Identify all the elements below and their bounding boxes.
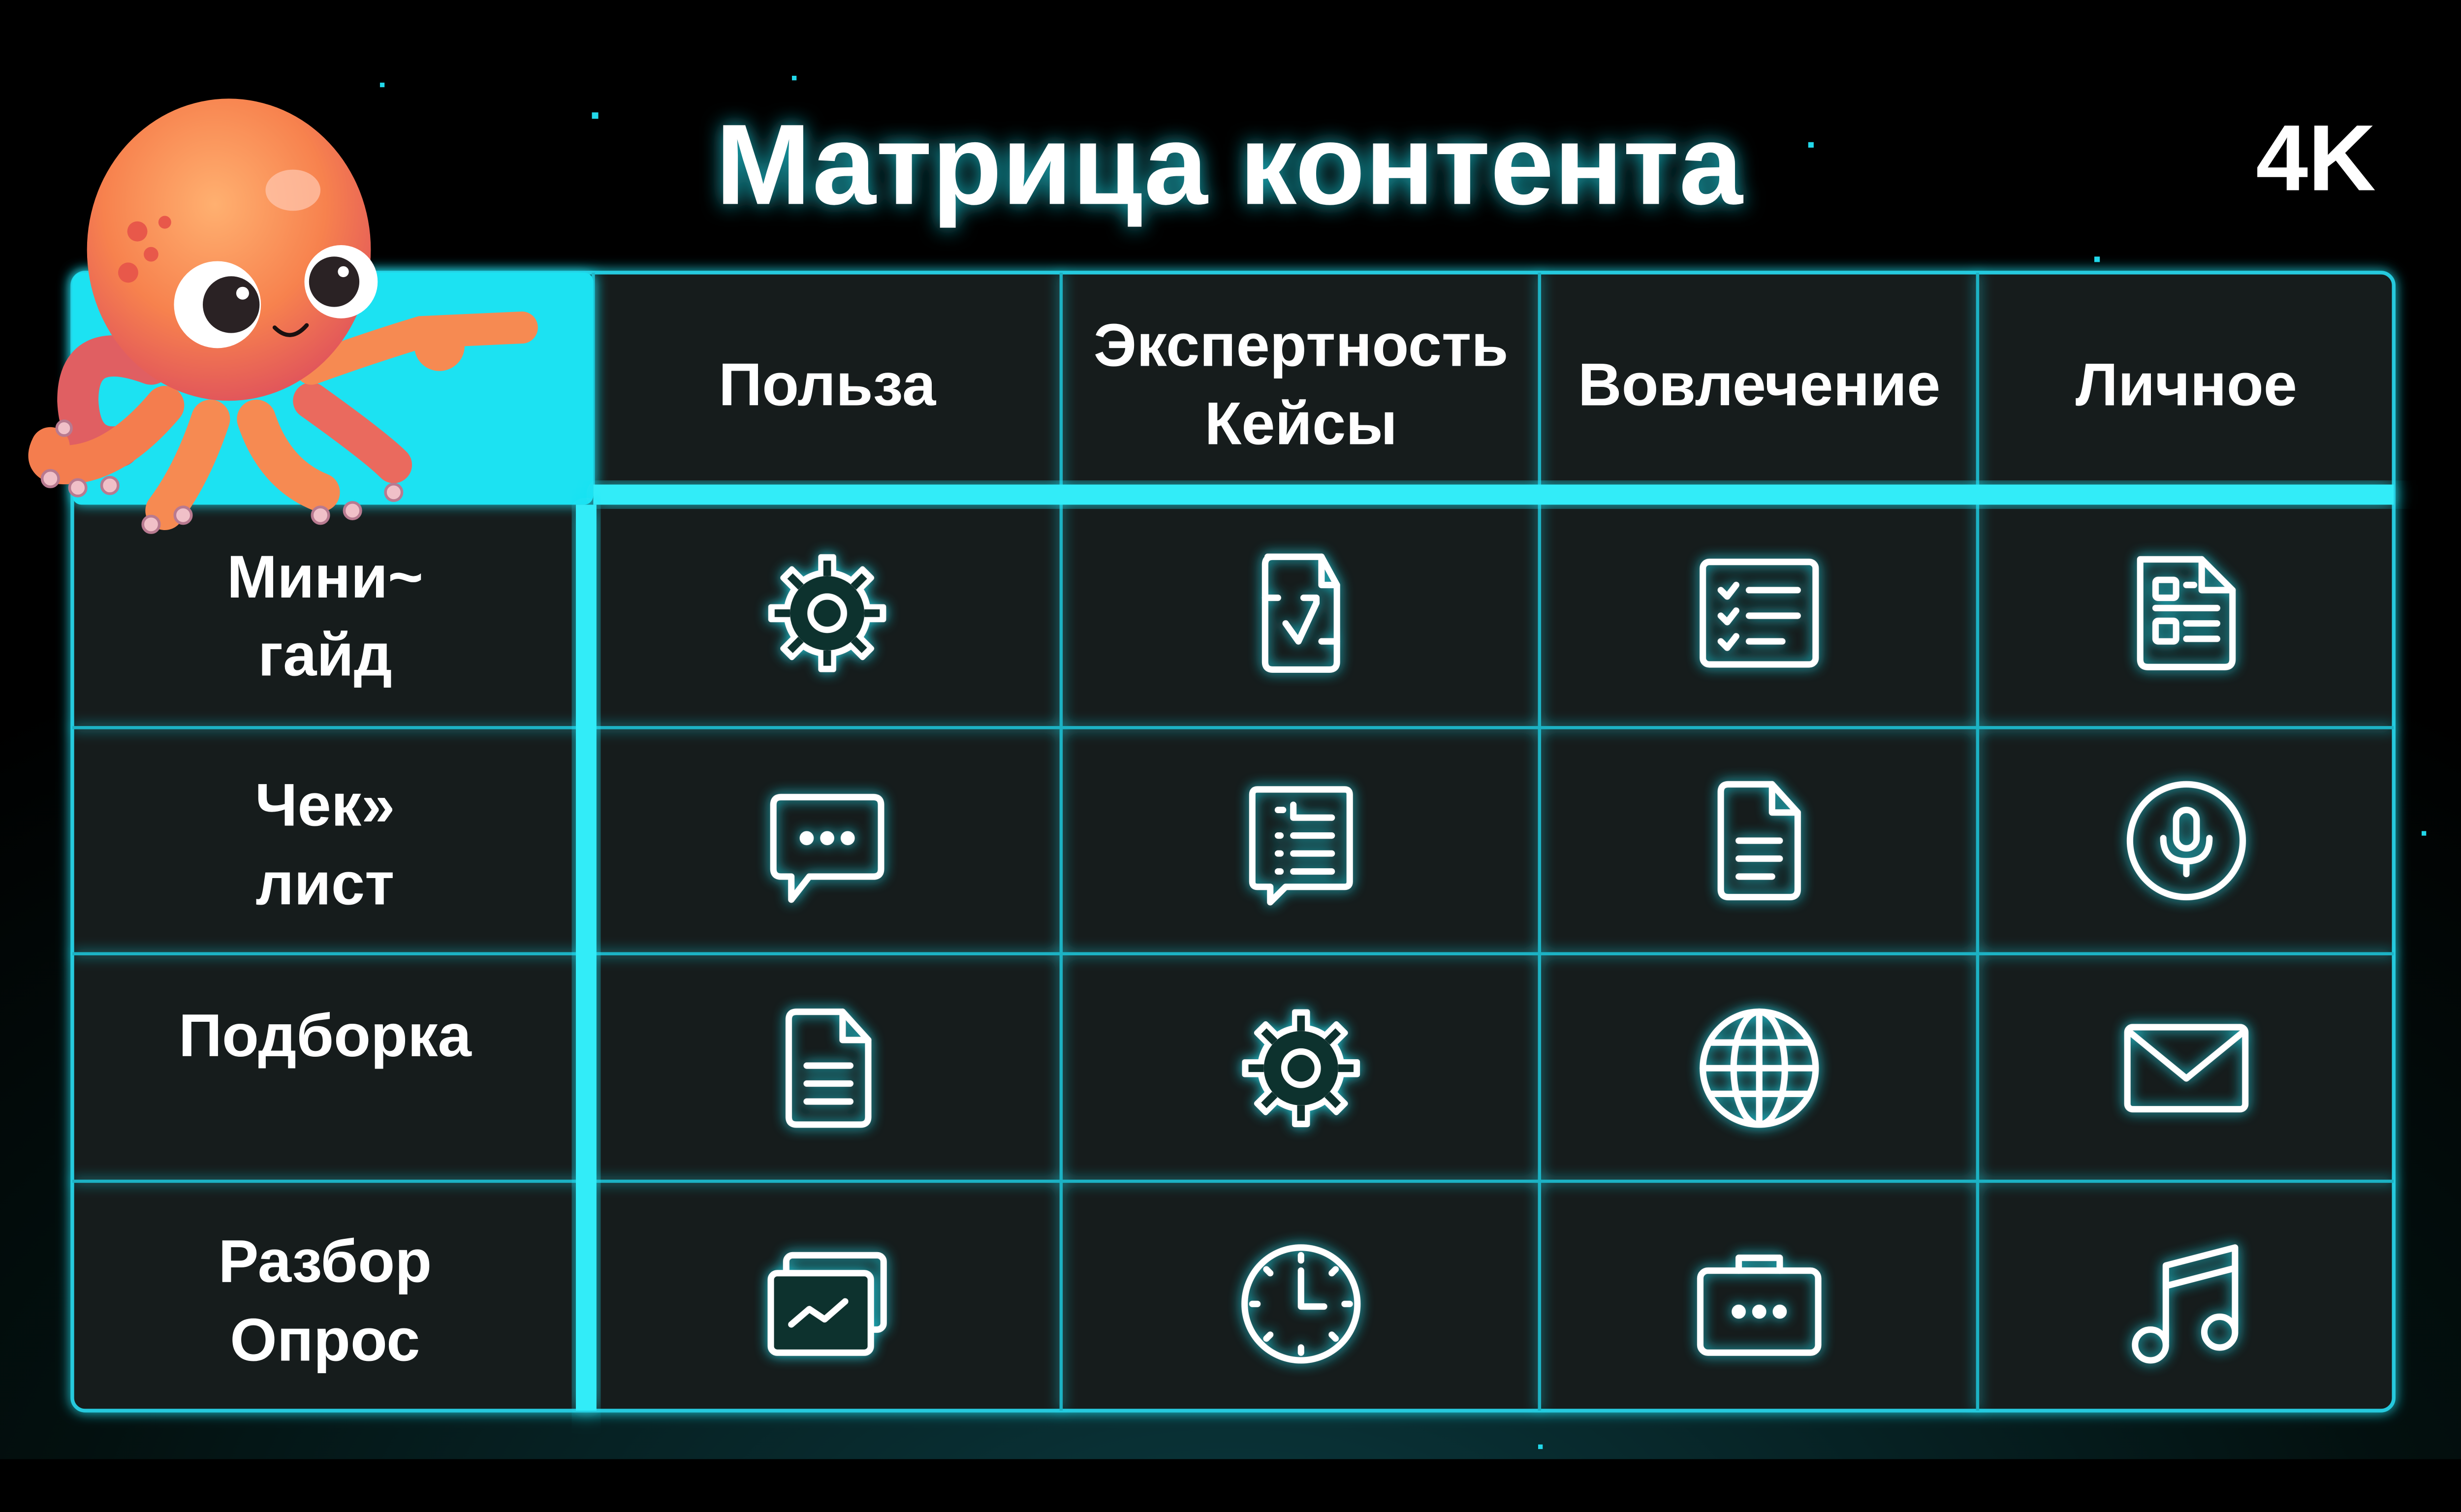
octopus mascot xyxy=(42,98,522,533)
header bar xyxy=(593,484,2394,504)
vertical bar xyxy=(576,504,597,1411)
column headers: Экспертность xyxy=(1094,312,1509,379)
row labels: гайд xyxy=(258,621,392,689)
icon: document xyxy=(789,1012,868,1125)
tentacles xyxy=(48,327,522,510)
row labels: Мини~ xyxy=(227,543,423,611)
icon: document check xyxy=(1265,557,1337,669)
icon: music note xyxy=(2135,1248,2235,1360)
icon: briefcase xyxy=(1700,1258,1818,1353)
row labels: Разбор xyxy=(218,1228,432,1295)
corner cyan cell xyxy=(72,273,593,504)
icon: clock xyxy=(1245,1248,1357,1360)
hand xyxy=(414,321,465,371)
icon: globe xyxy=(1703,1012,1816,1125)
icon: images chart xyxy=(771,1255,883,1353)
icon: gear xyxy=(768,554,886,672)
column headers: Личное xyxy=(2076,351,2297,419)
eyes xyxy=(174,261,261,348)
icon: form document xyxy=(2140,559,2233,667)
icon: chat bubble xyxy=(773,797,881,900)
badge: 4K: 4K xyxy=(2256,105,2376,210)
column headers: Польза xyxy=(719,351,937,419)
icon: checklist xyxy=(1703,562,1816,664)
icon: envelope xyxy=(2127,1027,2245,1109)
icon: microphone xyxy=(2130,784,2243,897)
column headers xyxy=(719,312,2297,458)
column headers: Кейсы xyxy=(1204,390,1397,458)
head xyxy=(87,98,371,401)
row labels xyxy=(179,543,473,1374)
icon: list bubble xyxy=(1252,789,1350,902)
icon: document lines xyxy=(1721,784,1798,897)
icon: gear 2 xyxy=(1242,1009,1360,1127)
row labels: Чек» xyxy=(255,771,395,839)
icons xyxy=(768,554,2245,1360)
suckers xyxy=(42,421,402,533)
row labels: лист xyxy=(255,850,394,917)
column headers: Вовлечение xyxy=(1578,351,1940,419)
row labels: Опрос xyxy=(230,1307,420,1374)
row labels: Подборка xyxy=(179,1002,473,1070)
title: Матрица контента xyxy=(716,101,1743,228)
matrix table xyxy=(72,273,2394,1411)
